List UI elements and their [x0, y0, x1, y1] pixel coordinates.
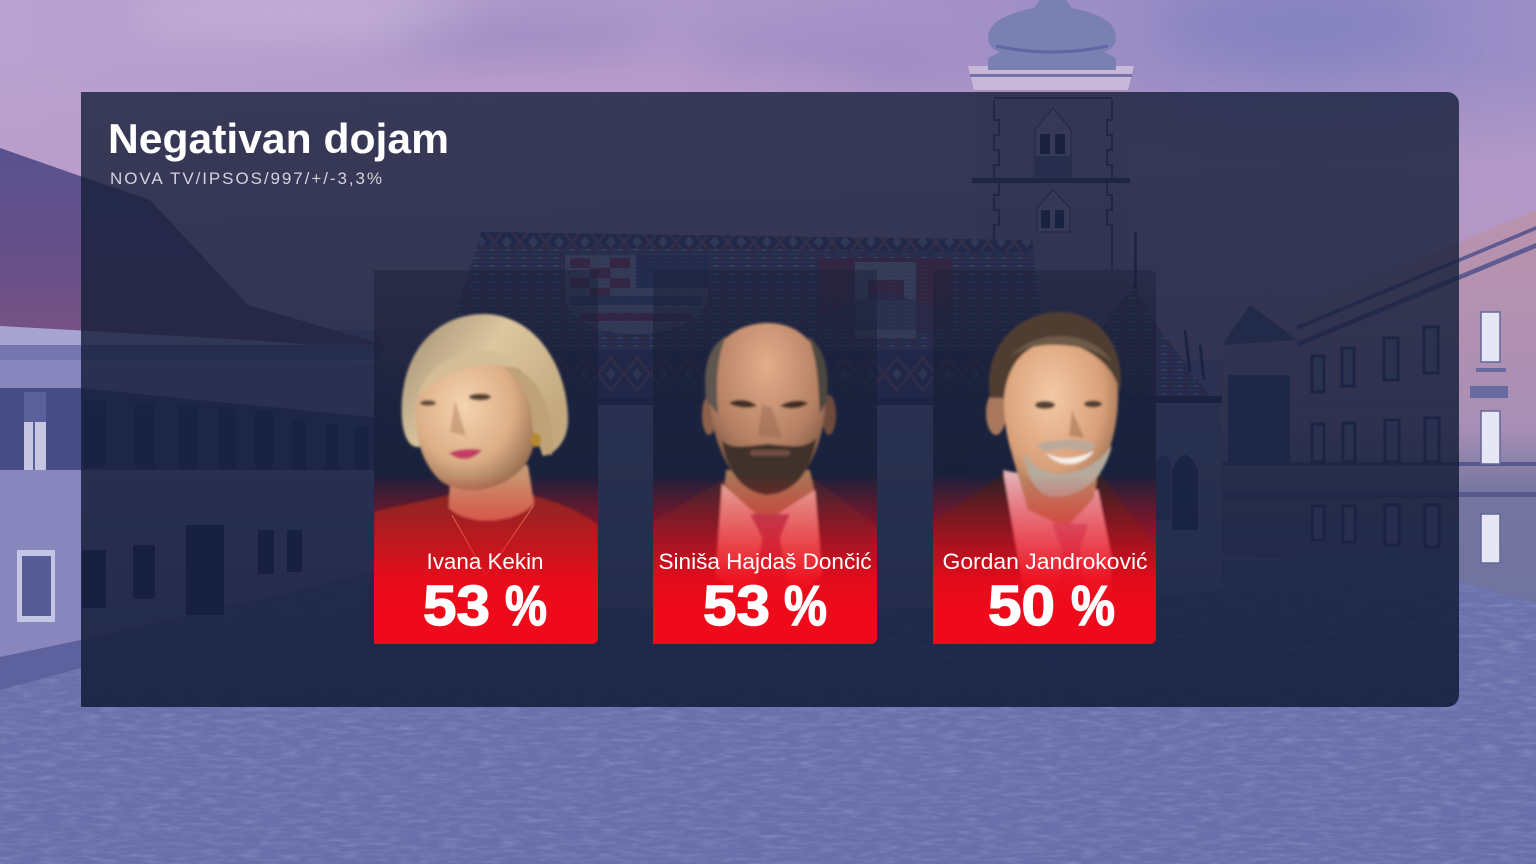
coats of arms on roof: [565, 255, 953, 338]
red gradient fade: [653, 475, 877, 644]
name: Ivana Kekin: Ivana Kekin: [426, 549, 544, 574]
cobbled ground: [0, 560, 1536, 864]
name: Gordan Jandroković: Gordan Jandroković: [942, 549, 1148, 574]
portrait: Siniša Hajdaš Dončić: [654, 321, 876, 587]
church tower: [976, 76, 1128, 316]
church walls and roof: [441, 395, 1222, 608]
gothic windows: [1172, 455, 1198, 530]
portrait: Ivana Kekin: [374, 314, 598, 644]
name: Siniša Hajdaš Dončić: Siniša Hajdaš Dončić: [658, 549, 872, 574]
right building: [1222, 210, 1536, 603]
value: 50 %: 50: [988, 574, 1055, 638]
card: Ivana Kekin: [374, 270, 598, 644]
card: Gordan Jandroković: [933, 270, 1156, 644]
value: 53 %: %: [505, 574, 547, 638]
portrait: Gordan Jandroković: [934, 311, 1146, 587]
left building: [0, 330, 380, 657]
red gradient fade: [374, 475, 598, 644]
value: 53 %: 53: [703, 574, 770, 638]
source line: NOVA TV/IPSOS/997/+/-3,3%: [110, 169, 382, 188]
red gradient fade: [933, 475, 1156, 644]
value: 50 %: %: [1071, 574, 1115, 638]
title: Negativan dojam: [108, 115, 449, 162]
panel: dark translucent overlay: [81, 92, 1459, 707]
card: Siniša Hajdaš Dončić: [653, 270, 877, 644]
value: 53 %: %: [784, 574, 827, 638]
value: 53 %: 53: [423, 574, 490, 638]
